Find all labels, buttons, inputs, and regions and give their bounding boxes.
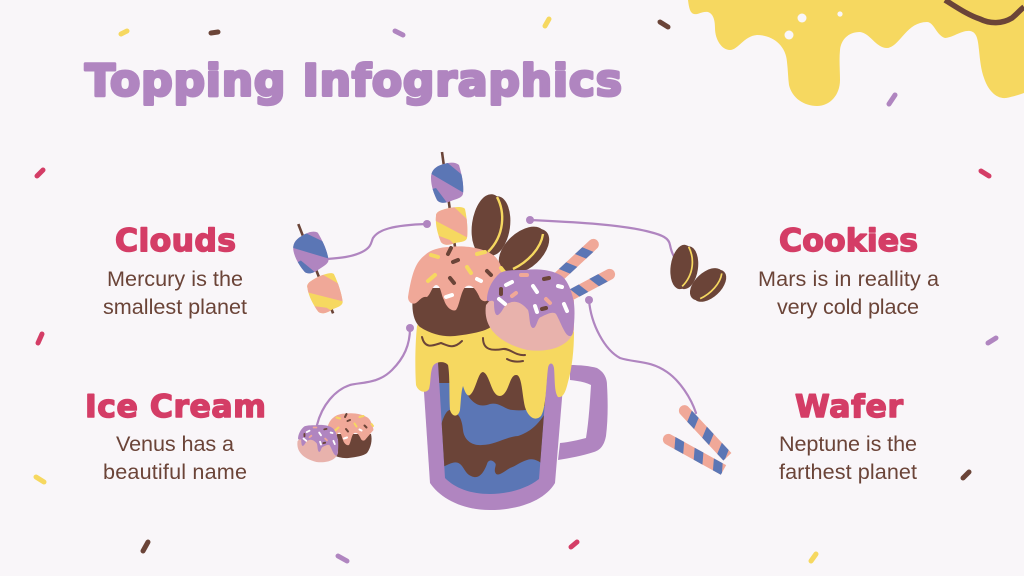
description: clouds: smallest planet (103, 294, 247, 319)
connector: ice cream (317, 324, 414, 425)
description: clouds (103, 266, 247, 319)
description: wafer: farthest planet (779, 459, 917, 484)
title: Topping Infographics (85, 56, 622, 106)
description: clouds: Mercury is the (107, 266, 243, 291)
text block: clouds (103, 223, 247, 319)
heading: clouds: Clouds (115, 223, 236, 259)
description: cookies: very cold place (777, 294, 919, 319)
connector: clouds (327, 220, 431, 259)
purple scoop (486, 269, 574, 351)
text block: wafer (779, 389, 917, 484)
description: wafer: Neptune is the (779, 431, 917, 456)
glass mug (422, 355, 608, 510)
text block: ice cream (85, 389, 266, 484)
heading: ice cream: Ice Cream (85, 389, 266, 425)
icon: ice cream scoops (297, 413, 374, 462)
icon: marshmallows (285, 218, 348, 323)
straws (544, 237, 617, 309)
connector: cookies (526, 216, 675, 258)
salmon scoop (408, 246, 505, 336)
marshmallows on stick (428, 152, 470, 250)
description: cookies (758, 266, 940, 319)
icon: wafers (661, 403, 731, 475)
cookies (468, 192, 557, 282)
heading: wafer: Wafer (795, 389, 903, 425)
description: ice cream (103, 431, 247, 484)
description: ice cream: Venus has a (116, 431, 235, 456)
illustration: milkshake (408, 152, 617, 510)
text block: cookies (758, 223, 940, 319)
yellow syrup (415, 300, 574, 419)
description: ice cream: beautiful name (103, 459, 247, 484)
description: wafer (779, 431, 917, 484)
heading: cookies: Cookies (779, 223, 918, 259)
description: cookies: Mars is in reallity a (758, 266, 940, 291)
decoration: dripping yellow syrup (688, 0, 1024, 106)
icon: cookies (668, 243, 732, 308)
connector: wafer (585, 296, 696, 413)
